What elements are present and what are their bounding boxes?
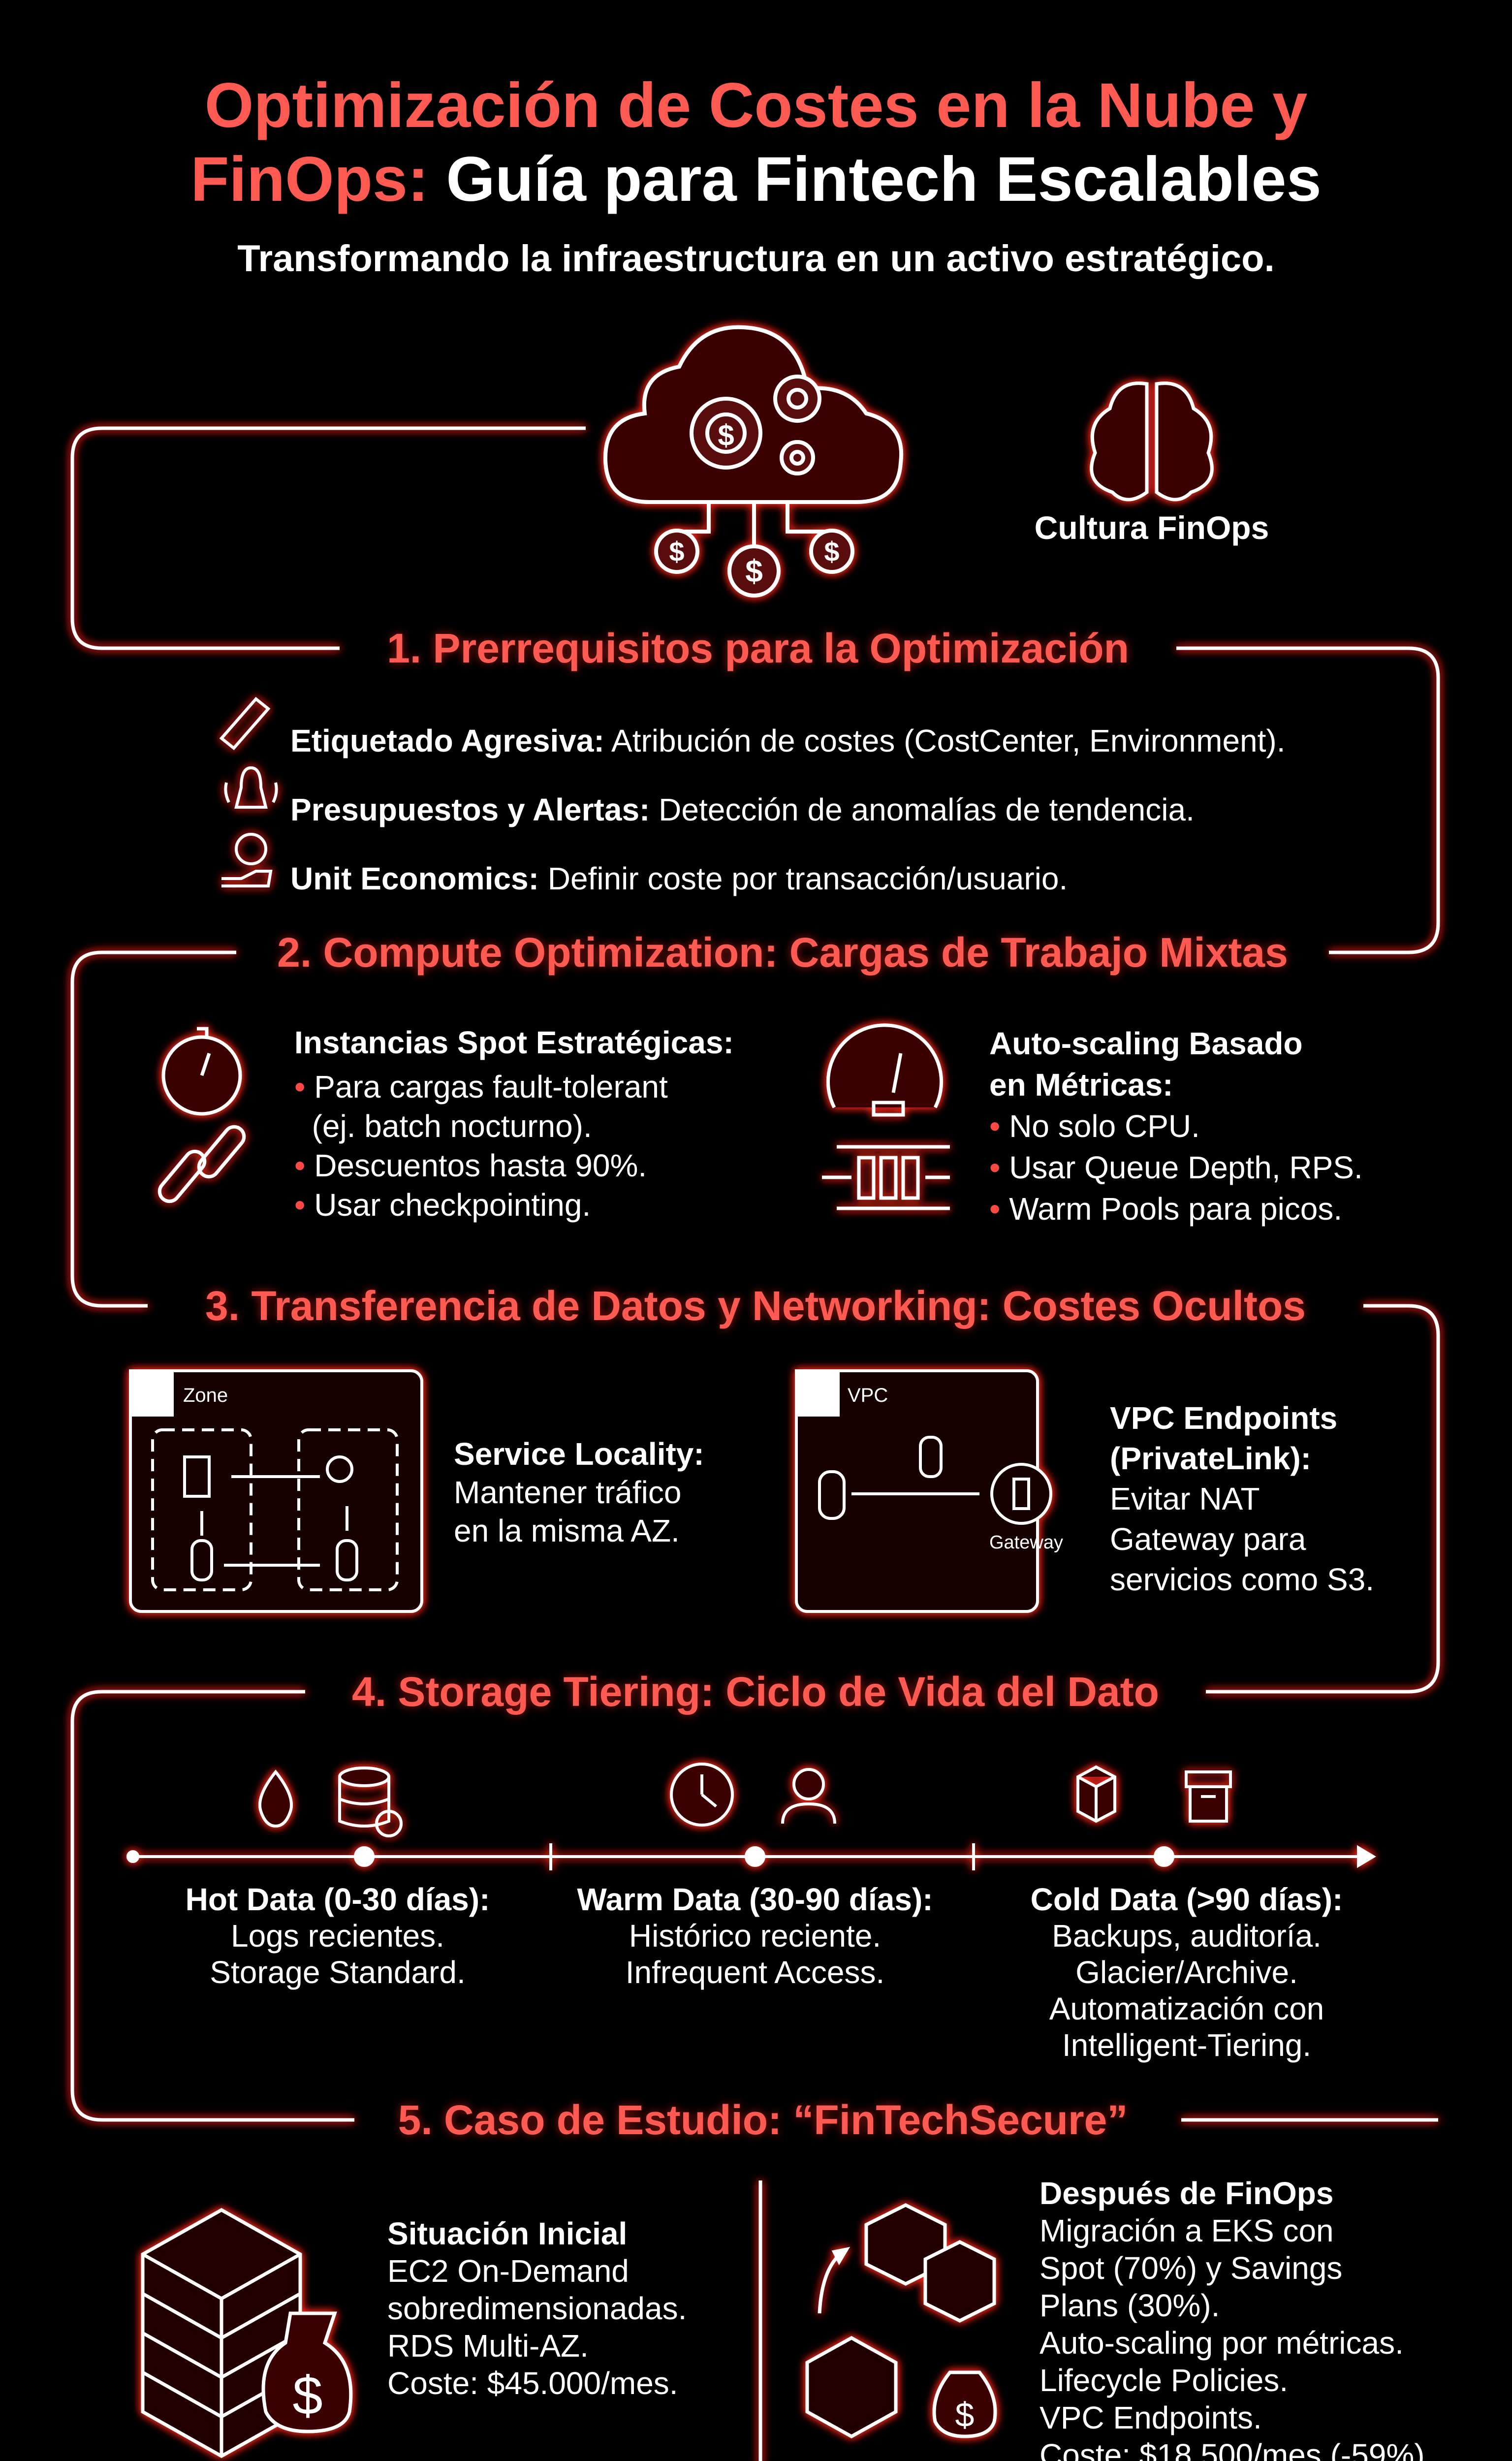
vpc label: VPC [848,1385,888,1406]
heading 5: 5. Caso de Estudio: “FinTechSecure” [398,2097,1128,2143]
service locality text [454,1436,704,1548]
situacion inicial: Coste: $45.000/mes. [387,2366,678,2401]
situacion inicial: Situación Inicial [387,2216,627,2251]
section 2 left: Instancias Spot Estratégicas: [294,1025,734,1060]
section 2 left: • Usar checkpointing. [294,1187,591,1223]
zone label: Zone [183,1385,228,1406]
title: Optimización de Costes en la Nube y [205,70,1307,141]
despues de finops: Plans (30%). [1040,2288,1220,2323]
section 3 boxes [130,1371,1051,1611]
section 2 left [294,1025,734,1223]
section 1 items: Etiquetado Agresiva: Atribución de costes (CostCenter, Environment). [290,723,1286,758]
section 2 right: Auto-scaling Basado [989,1026,1303,1061]
situacion inicial: EC2 On-Demand [387,2253,629,2289]
despues de finops: Lifecycle Policies. [1040,2363,1288,2398]
subtitle: Transformando la infraestructura en un activo estratégico. [237,238,1275,280]
section 1 items: Unit Economics: Definir coste por transacción/usuario. [290,861,1068,896]
section 2 right: en Métricas: [989,1067,1173,1103]
despues de finops: VPC Endpoints. [1040,2400,1262,2435]
icons section 1 [221,699,277,886]
service locality text: en la misma AZ. [454,1513,680,1548]
section 2 right: • No solo CPU. [989,1108,1200,1144]
section 2 right [989,1026,1363,1227]
situacion inicial [387,2215,687,2402]
heading 3: 3. Transferencia de Datos y Networking: Costes Ocultos [205,1283,1306,1329]
connector line cloud to brain [928,432,1068,436]
hot data: Logs recientes. [231,1918,444,1954]
despues de finops [1040,2175,1433,2461]
section 5 icons and divider: $ [292,2366,323,2426]
heading 4: 4. Storage Tiering: Ciclo de Vida del Dato [352,1669,1159,1715]
icon: brain [1092,383,1212,500]
situacion inicial: RDS Multi-AZ. [387,2328,589,2364]
situacion inicial: sobredimensionadas. [387,2291,687,2326]
warm data: Histórico reciente. [629,1918,881,1954]
section 2 left: • Para cargas fault-tolerant [294,1069,668,1104]
heading 2: 2. Compute Optimization: Cargas de Trabajo Mixtas [277,929,1288,976]
despues de finops: Después de FinOps [1040,2176,1333,2211]
section 2 left: (ej. batch nocturno). [312,1108,592,1144]
cold data: Backups, auditoría. [1052,1918,1322,1954]
icons section 2 [156,1025,950,1208]
frame path [72,428,1438,2120]
vpc endpoints text: Gateway para [1110,1521,1306,1557]
section 2 right: • Usar Queue Depth, RPS. [989,1150,1363,1185]
cold data: Cold Data (>90 días): [1031,1882,1343,1917]
section 5 icons and divider: $ [955,2396,974,2434]
hero label: Cultura FinOps [1035,509,1269,546]
hot data: Hot Data (0-30 días): [186,1882,490,1917]
heading 1: 1. Prerrequisitos para la Optimización [387,625,1129,671]
section 1 items [290,723,1286,896]
vpc endpoints text: VPC Endpoints [1110,1400,1337,1436]
despues de finops: Spot (70%) y Savings [1040,2250,1342,2286]
warm data [577,1882,933,1990]
section 5 icons and divider [143,2180,995,2461]
cold data [1031,1881,1343,2063]
warm data: Warm Data (30-90 días): [577,1882,933,1917]
vpc endpoints text: Evitar NAT [1110,1481,1260,1516]
service locality text: Mantener tráfico [454,1475,681,1510]
warm data: Infrequent Access. [626,1955,884,1990]
vpc endpoints text: (PrivateLink): [1110,1441,1311,1476]
despues de finops: Migración a EKS con [1040,2213,1334,2248]
title: FinOps: Guía para Fintech Escalables [190,144,1322,215]
cold data: Automatización con [1049,1991,1324,2026]
section 4 timeline and icons [128,1764,1373,1870]
vpc endpoints text: servicios como S3. [1110,1562,1374,1597]
gateway label: Gateway [989,1532,1063,1553]
hot data: Storage Standard. [210,1955,466,1990]
hot data [186,1882,490,1990]
vpc endpoints text [1110,1400,1374,1597]
section 1 items: Presupuestos y Alertas: Detección de anomalías de tendencia. [290,792,1195,827]
icon: hero cloud with gears and coins: $ [745,553,763,589]
cold data: Intelligent-Tiering. [1062,2027,1311,2063]
icon: hero cloud with gears and coins: $ [718,419,734,452]
icon: hero cloud with gears and coins: $ [669,536,685,567]
title [190,70,1322,215]
section 2 left: • Descuentos hasta 90%. [294,1148,647,1183]
icon: hero cloud with gears and coins: $ [824,536,840,567]
icon: hero cloud with gears and coins [605,327,901,596]
cold data: Glacier/Archive. [1075,1955,1298,1990]
section 2 right: • Warm Pools para picos. [989,1191,1342,1227]
despues de finops: Auto-scaling por métricas. [1040,2325,1404,2361]
service locality text: Service Locality: [454,1436,704,1472]
